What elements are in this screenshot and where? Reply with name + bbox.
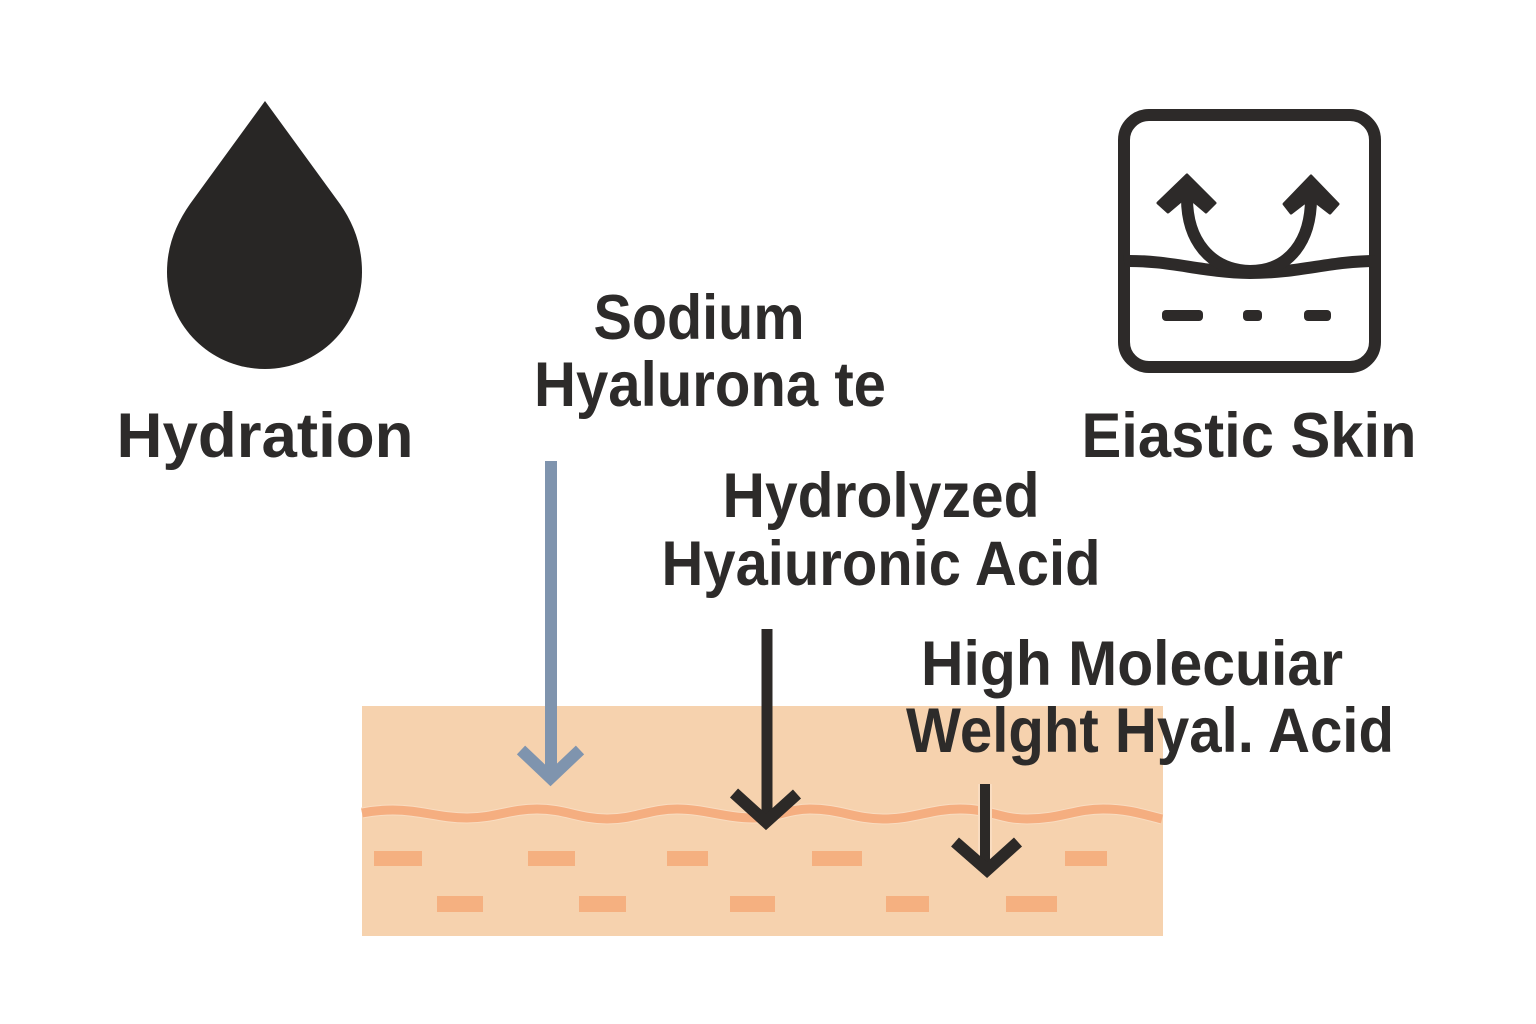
arrow: sodium hyaluronate <box>521 461 580 778</box>
label: Hydrolyzed Hyaluronic Acid: Hydrolyzed <box>722 461 1040 531</box>
label: High Molecular Weight Hyal. Acid <box>906 629 1394 766</box>
label: Sodium Hyaluronate <box>534 283 886 420</box>
label: Sodium Hyaluronate: Hyalurona te <box>534 350 886 420</box>
label: High Molecular Weight Hyal. Acid: High Molecuiar <box>921 629 1343 699</box>
panel: skin cross-section <box>362 706 1163 936</box>
icon: water drop <box>167 101 362 369</box>
label: Sodium Hyaluronate: Sodium <box>594 283 804 353</box>
label: High Molecular Weight Hyal. Acid: Welght Hyal. Acid <box>906 696 1394 766</box>
heading: Hydration: Hydration <box>116 401 414 471</box>
label: Hydrolyzed Hyaluronic Acid: Hyaiuronic Acid <box>662 529 1100 599</box>
icon: elastic skin <box>1124 115 1376 367</box>
arrow: high molecular weight <box>955 784 1018 870</box>
label: Hydrolyzed Hyaluronic Acid <box>662 461 1100 599</box>
arrow: hydrolyzed hyaluronic acid <box>734 629 797 822</box>
heading: Elastic Skin: Eiastic Skin <box>1082 401 1416 471</box>
